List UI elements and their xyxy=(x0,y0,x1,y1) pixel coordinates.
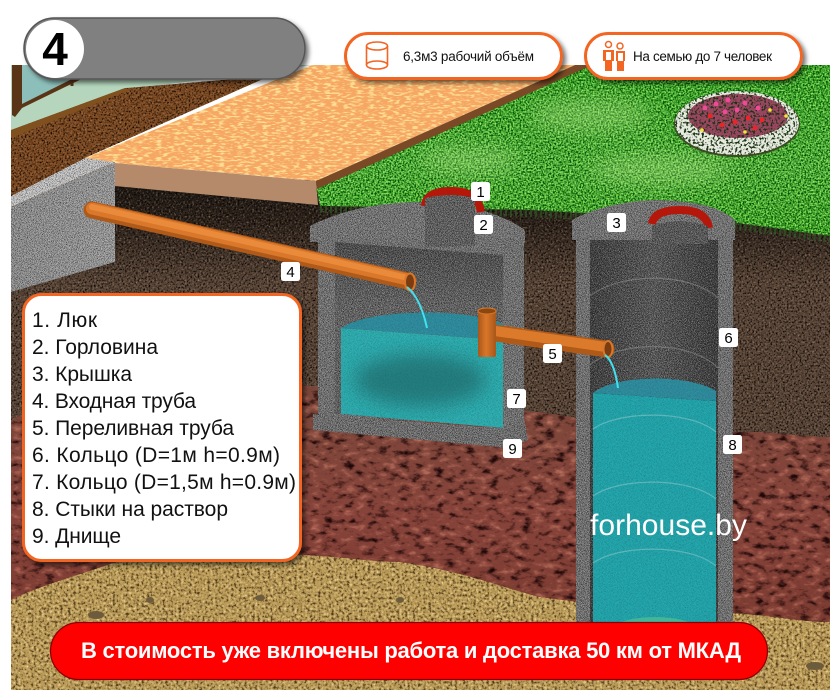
tag 6 xyxy=(719,328,738,347)
icon: two people xyxy=(603,42,625,71)
legend list: 9. Днище xyxy=(32,525,121,548)
tag 4 xyxy=(281,262,300,281)
tag 2 xyxy=(474,215,493,234)
tag 8: 8 xyxy=(728,437,737,454)
lawn edge roots xyxy=(320,209,830,239)
legend list xyxy=(32,309,296,548)
first tank: large ring xyxy=(310,191,528,448)
legend list: 7. Кольцо (D=1,5м h=0.9м) xyxy=(32,471,296,494)
tag 4: 4 xyxy=(286,264,295,281)
house window xyxy=(12,65,80,117)
legend panel xyxy=(24,294,300,560)
tank 1 neck xyxy=(425,191,481,247)
tag 7: 7 xyxy=(512,391,521,408)
tank 1 base xyxy=(313,414,528,448)
tank 1 walls xyxy=(318,238,524,428)
overflow pipe xyxy=(478,308,612,357)
tag 9 xyxy=(503,439,522,458)
tag 3: 3 xyxy=(612,215,621,232)
icon: cylinder xyxy=(366,42,388,69)
tank 2 water body xyxy=(593,393,716,636)
tank 1 water body xyxy=(341,328,503,428)
tag 6: 6 xyxy=(724,330,733,347)
tank 2 ring seams xyxy=(590,278,718,566)
legend list: 3. Крышка xyxy=(32,363,132,386)
hatch 1 xyxy=(425,191,481,212)
tag 9: 9 xyxy=(508,441,517,458)
underground: sand layer xyxy=(11,554,830,690)
house plinth xyxy=(11,80,262,207)
tank 2 sediment xyxy=(622,617,688,622)
family pill xyxy=(586,34,802,78)
number: 4 xyxy=(42,23,68,75)
tank 1 inner cavity xyxy=(335,242,503,428)
paved path top xyxy=(85,65,575,181)
number tags xyxy=(281,182,742,458)
inlet pipe xyxy=(92,207,415,290)
family text: На семью до 7 человек xyxy=(633,49,772,64)
plinth trim xyxy=(11,88,130,138)
overflow water stream xyxy=(605,355,618,388)
header pill with number xyxy=(24,18,305,79)
capacity text: 6,3м3 рабочий объём xyxy=(403,49,534,64)
tank 2 neck xyxy=(652,221,708,244)
tank 1 water dark core xyxy=(354,354,486,406)
tank 1 water surface xyxy=(341,312,503,340)
concrete foundation xyxy=(11,158,115,292)
tank 2 lid xyxy=(572,200,735,240)
tank 2 walls xyxy=(576,236,733,636)
tag 7 xyxy=(507,389,526,408)
number badge xyxy=(26,20,84,78)
second tank: narrow rings xyxy=(572,200,735,643)
tank 2 inner cavity xyxy=(590,240,718,636)
legend list: 6. Кольцо (D=1м h=0.9м) xyxy=(32,444,280,467)
tag 1 xyxy=(471,182,490,201)
underground: red clay layer xyxy=(11,385,830,640)
capacity pill xyxy=(346,34,562,78)
red banner xyxy=(50,622,768,680)
sand pebbles xyxy=(88,595,824,670)
legend list: 8. Стыки на раствор xyxy=(32,498,228,521)
tag 2: 2 xyxy=(479,217,488,234)
underground: topsoil layer xyxy=(11,180,830,450)
legend list: 2. Горловина xyxy=(32,336,158,359)
paved path right edge xyxy=(316,65,592,189)
house wall xyxy=(11,65,312,133)
legend list: 5. Переливная труба xyxy=(32,417,234,440)
tag 1: 1 xyxy=(476,184,485,201)
watermark: forhouse.by xyxy=(590,509,747,542)
hatch 2 xyxy=(652,210,709,228)
tank 2 water surface xyxy=(593,378,716,401)
paved path front face xyxy=(115,163,318,205)
banner text: В стоимость уже включены работа и доставка 50 км от МКАД xyxy=(81,638,741,663)
tag 5: 5 xyxy=(548,346,557,363)
legend list: 1. Люк xyxy=(32,309,98,332)
tag 3 xyxy=(607,213,626,232)
inlet water stream xyxy=(407,287,427,328)
flower bed xyxy=(674,91,800,157)
tag 5 xyxy=(543,344,562,363)
lawn with grass xyxy=(316,65,830,236)
lawn: lighter patches xyxy=(420,97,730,186)
tank 1 slab xyxy=(310,202,525,242)
legend list: 4. Входная труба xyxy=(32,390,196,413)
tag 8 xyxy=(723,435,742,454)
